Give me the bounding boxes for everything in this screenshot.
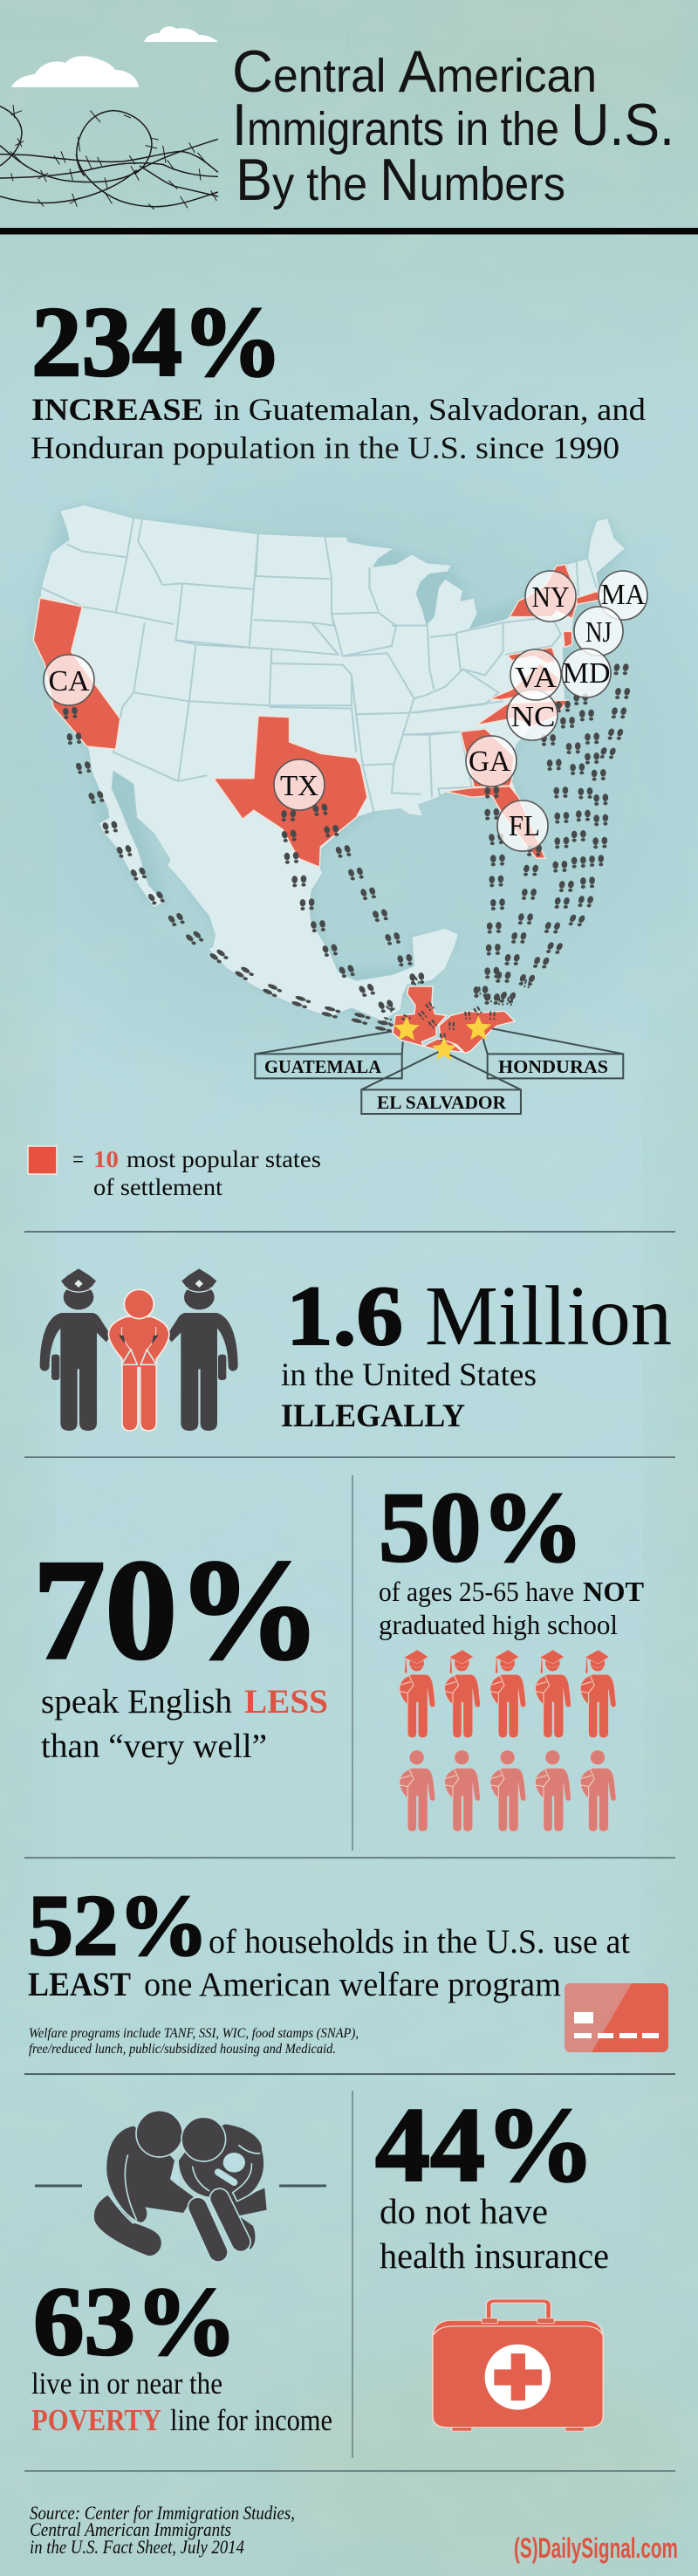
- panel: 1.6 million illegally: in the United States: [281, 1357, 537, 1393]
- label: Honduras: HONDURAS: [498, 1056, 608, 1077]
- label: GA: [466, 736, 517, 787]
- icon: graduates row: [399, 1650, 616, 1738]
- legend: =: [72, 1146, 84, 1172]
- label: CA: [44, 655, 94, 705]
- text: welfare note: Welfare programs include TANF, SSI, WIC, food stamps (SNAP),: [29, 2026, 359, 2041]
- label: NY: [525, 571, 576, 622]
- label: TX: [274, 759, 325, 810]
- label: MD: MD: [562, 657, 611, 690]
- stat: 234%: INCREASE: [31, 392, 203, 427]
- panel: 44% no health insurance: do not have: [380, 2191, 548, 2231]
- state: Virginia: [489, 663, 558, 700]
- map: highlighted settlement states: [33, 565, 600, 867]
- title: [232, 38, 674, 213]
- panel: 50% not graduated: NOT: [583, 1576, 644, 1607]
- label: El Salvador: EL SALVADOR: [377, 1092, 507, 1113]
- panel: 44% no health insurance: 44%: [375, 2086, 595, 2204]
- label: NY: NY: [532, 581, 569, 614]
- label: MD: [562, 649, 611, 697]
- label: FL: FL: [509, 810, 540, 842]
- label: TX: TX: [280, 770, 318, 802]
- panel: 63% poverty: 63%: [33, 2268, 237, 2376]
- title: Central American: [232, 38, 597, 105]
- map: routes from Central America to U.S. states: [0, 471, 698, 1114]
- stat: 234%: 234%: [31, 286, 283, 397]
- label: CA: CA: [49, 665, 90, 697]
- stat: 234%: Honduran population in the U.S. since 1990: [31, 430, 619, 465]
- header: [0, 26, 674, 213]
- label: FL: [497, 800, 548, 851]
- panel: 63% poverty: live in or near the: [31, 2366, 222, 2401]
- panel: 52% welfare: one American welfare program: [144, 1966, 561, 2003]
- panel: 70% speak English: speak English: [41, 1683, 232, 1721]
- state: New Jersey: [563, 631, 572, 648]
- title: Immigrants in the U.S.: [232, 92, 674, 158]
- label: GA: GA: [469, 745, 510, 778]
- panel: 50% not graduated: of ages 25-65 have: [379, 1576, 574, 1607]
- icon: barbed wire: [0, 105, 218, 210]
- panel: 70% speak English: [33, 1531, 328, 1765]
- title: By the Numbers: [236, 147, 565, 213]
- text: welfare note: [29, 2026, 359, 2057]
- label: NJ: [574, 607, 623, 656]
- map: Central America countries and stars: [381, 975, 532, 1060]
- panel: 63% poverty: [31, 2111, 332, 2437]
- state: Maryland: [508, 648, 557, 663]
- panel: 1.6 million illegally: ILLEGALLY: [281, 1398, 465, 1434]
- panel: 52% welfare: LEAST: [28, 1966, 131, 2003]
- map: footprints: [63, 663, 631, 1033]
- icon: small cloud: [144, 26, 218, 42]
- icon: non-graduates row: [399, 1750, 616, 1831]
- legend: [28, 1146, 321, 1200]
- panel: 44% no health insurance: [375, 2086, 609, 2431]
- panel: 50% not graduated: graduated high school: [379, 1609, 618, 1640]
- label: NC: NC: [511, 701, 555, 733]
- panel: 50% not graduated: [379, 1472, 644, 1831]
- panel: 1.6 million illegally: [40, 1268, 672, 1434]
- icon: medical kit: [433, 2301, 603, 2431]
- panel: 50% not graduated: 50%: [379, 1472, 584, 1583]
- icon: large cloud: [11, 56, 139, 87]
- legend: most popular states: [127, 1146, 321, 1172]
- state: Massachusetts: [577, 591, 600, 604]
- panel: 52% welfare: of households in the U.S. use at: [209, 1923, 630, 1961]
- label: Guatemala: GUATEMALA: [264, 1056, 382, 1077]
- label: VA: VA: [515, 662, 557, 694]
- source note: Source: Center for Immigration Studies,: [30, 2502, 295, 2524]
- legend: 10: [93, 1146, 119, 1172]
- state: New York: [510, 565, 577, 618]
- legend: of settlement: [93, 1174, 223, 1200]
- callout: country labels: [255, 1028, 623, 1114]
- source note: in the U.S. Fact Sheet, July 2014: [30, 2536, 244, 2558]
- panel: 70% speak English: LESS: [244, 1683, 328, 1721]
- label: NJ: NJ: [585, 616, 612, 649]
- label: NC: [507, 690, 558, 740]
- panel: 70% speak English: than “very well”: [41, 1728, 267, 1765]
- icon: credit card: [565, 1983, 668, 2052]
- panel: 63% poverty: line for income: [170, 2403, 332, 2437]
- state: North Carolina: [476, 700, 568, 726]
- icon: huddled family: [94, 2111, 267, 2256]
- text: welfare note: free/reduced lunch, public/subsidized housing and Medicaid.: [29, 2042, 336, 2057]
- panel: 44% no health insurance: health insurance: [380, 2236, 609, 2276]
- map: state circle labels: [44, 571, 647, 851]
- state: Florida: [445, 787, 545, 858]
- panel: 70% speak English: 70%: [33, 1531, 321, 1689]
- label: VA: [510, 649, 561, 700]
- panel: 63% poverty: POVERTY: [31, 2403, 161, 2437]
- figure: 1.6 Million: Million: [425, 1269, 672, 1364]
- figure: 1.6 Million: 1.6: [286, 1269, 403, 1364]
- source note: [30, 2502, 295, 2558]
- state: Texas: [214, 716, 367, 867]
- state: California: [33, 598, 120, 749]
- label: MA: [599, 571, 647, 620]
- icon: police officers and handcuffed person: [40, 1268, 238, 1431]
- map: U.S. and Mexico landmass: [33, 505, 626, 1021]
- source note: Central American Immigrants: [30, 2518, 231, 2540]
- panel: 52% welfare: 52%: [28, 1877, 209, 1974]
- state: Georgia: [461, 729, 514, 787]
- panel: 52% welfare: [28, 1877, 668, 2057]
- stat: 234%: in Guatemalan, Salvadoran, and: [214, 392, 646, 427]
- figure: 1.6 Million: [286, 1269, 672, 1364]
- label: MA: MA: [600, 579, 646, 611]
- stat: 234%: [31, 286, 646, 465]
